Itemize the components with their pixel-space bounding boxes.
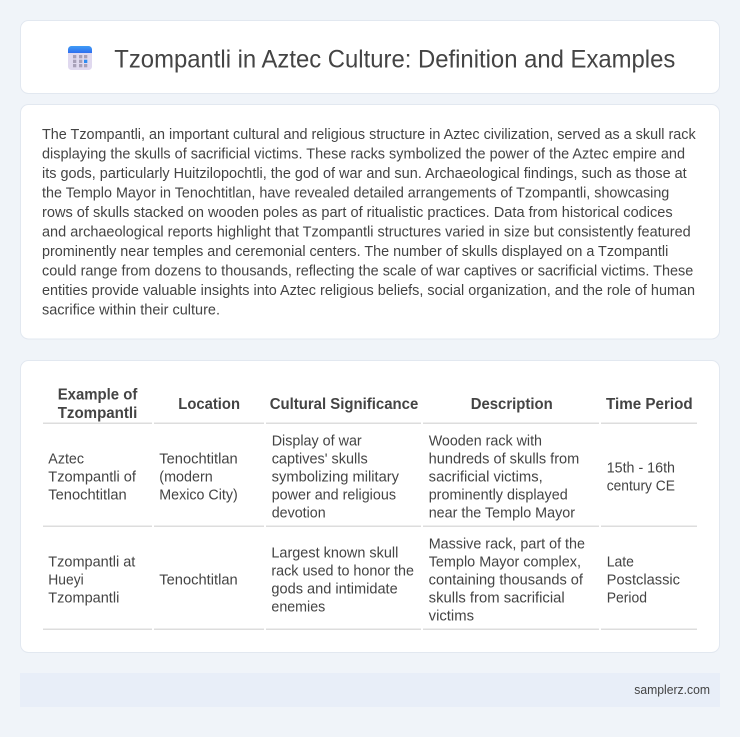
cell: description: skulls from sacrificial xyxy=(429,590,565,606)
footer: site name: samplerz.com xyxy=(634,683,710,697)
cell: significance: Largest known skull xyxy=(271,545,398,561)
cell: location: (modern xyxy=(159,469,213,485)
header: example: Example of xyxy=(58,386,138,403)
cell: time period: century CE xyxy=(607,478,675,494)
cell: time period xyxy=(607,460,675,494)
header: cultural significance: Cultural Significance xyxy=(270,396,418,413)
cell: significance xyxy=(271,545,414,615)
cell: description: Templo Mayor complex, xyxy=(429,554,581,570)
header: example: Tzompantli xyxy=(58,405,137,422)
cell: time period: Late xyxy=(607,554,634,570)
cell: description: victims xyxy=(429,608,474,624)
text block: description paragraph: its gods, particularly Huitzilopochtli, the god of war and sun. Archaeological findings, such as those at xyxy=(42,166,687,182)
header: location: Location xyxy=(178,396,240,413)
cell: description: sacrificial victims, xyxy=(429,469,543,485)
cell: example xyxy=(48,451,137,503)
text block: description paragraph: displaying the skulls of sacrificial victims. These racks symbolized the power of the Aztec empire and xyxy=(42,146,685,162)
text block: description paragraph: sacrifice within their culture. xyxy=(42,302,220,318)
header: time period: Time Period xyxy=(606,396,693,413)
cell: significance: rack used to honor the xyxy=(271,563,414,579)
cell: example xyxy=(48,554,135,606)
text block: description paragraph: The Tzompantli, an important cultural and religious structure in Aztec civilization, served as a skull rack xyxy=(42,127,696,143)
cell: significance xyxy=(272,433,400,521)
cell: description: hundreds of skulls from xyxy=(429,451,579,467)
text block: description paragraph: prominently near temples and ceremonial centers. The number of skulls displayed on a Tzompantli xyxy=(42,244,668,260)
cell: location: Mexico City) xyxy=(159,487,238,503)
cell: example: Hueyi xyxy=(48,572,84,588)
table header row xyxy=(58,386,693,422)
cell: description: containing thousands of xyxy=(429,572,584,588)
panel: description xyxy=(20,104,720,339)
cell: significance: enemies xyxy=(271,599,325,615)
text block: description paragraph: entities provide valuable insights into Aztec religious beliefs, social organization, and the role of human xyxy=(42,283,695,299)
cell: significance: symbolizing military xyxy=(272,469,400,485)
cell: location: Tenochtitlan xyxy=(159,572,238,588)
cell: time period: 15th - 16th xyxy=(607,460,675,476)
cell: significance: power and religious xyxy=(272,487,396,503)
cell: description: Massive rack, part of the xyxy=(429,536,585,552)
cell: location: Tenochtitlan xyxy=(159,451,238,467)
text block: description paragraph: could range from dozens to thousands, reflecting the scale of war captives or sacrificial victims. These xyxy=(42,264,693,280)
cell: time period: Postclassic xyxy=(607,572,680,588)
header: example xyxy=(58,386,138,422)
header: description: Description xyxy=(471,396,553,413)
text block: description paragraph xyxy=(42,127,696,318)
cell: significance: devotion xyxy=(272,505,326,521)
cell: time period: Period xyxy=(607,590,647,606)
cell: significance: gods and intimidate xyxy=(271,581,398,597)
cell: example: Aztec xyxy=(48,451,84,467)
cell: example: Tzompantli xyxy=(48,590,119,606)
table row 2 xyxy=(48,536,680,624)
cell: description: near the Templo Mayor xyxy=(429,505,575,521)
footer bar xyxy=(20,673,720,707)
panel: table card xyxy=(20,360,720,652)
icon: calendar xyxy=(68,46,92,70)
cell: location xyxy=(159,451,238,503)
cell: example: Tzompantli at xyxy=(48,554,135,570)
panel: title card xyxy=(20,20,720,94)
text block: description paragraph: and archaeological reports highlight that Tzompantli structures varied in size but consistently featured xyxy=(42,224,691,240)
cell: significance: captives' skulls xyxy=(272,451,368,467)
cell: significance: Display of war xyxy=(272,433,362,449)
cell: description xyxy=(429,536,585,624)
cell: example: Tenochtitlan xyxy=(48,487,127,503)
cell: example: Tzompantli of xyxy=(48,469,137,485)
cell: description: prominently displayed xyxy=(429,487,568,503)
table row 1 xyxy=(48,433,675,521)
cell: description: Wooden rack with xyxy=(429,433,542,449)
text block: description paragraph: the Templo Mayor in Tenochtitlan, have revealed detailed arrangements of Tzompantli, showcasing xyxy=(42,186,669,202)
text block: description paragraph: rows of skulls stacked on wooden poles as part of ritualistic practices. Data from historical codices xyxy=(42,205,673,221)
cell: description xyxy=(429,433,579,521)
title: Tzompantli in Aztec Culture: Definition and Examples xyxy=(114,46,675,74)
cell: time period xyxy=(607,554,680,606)
